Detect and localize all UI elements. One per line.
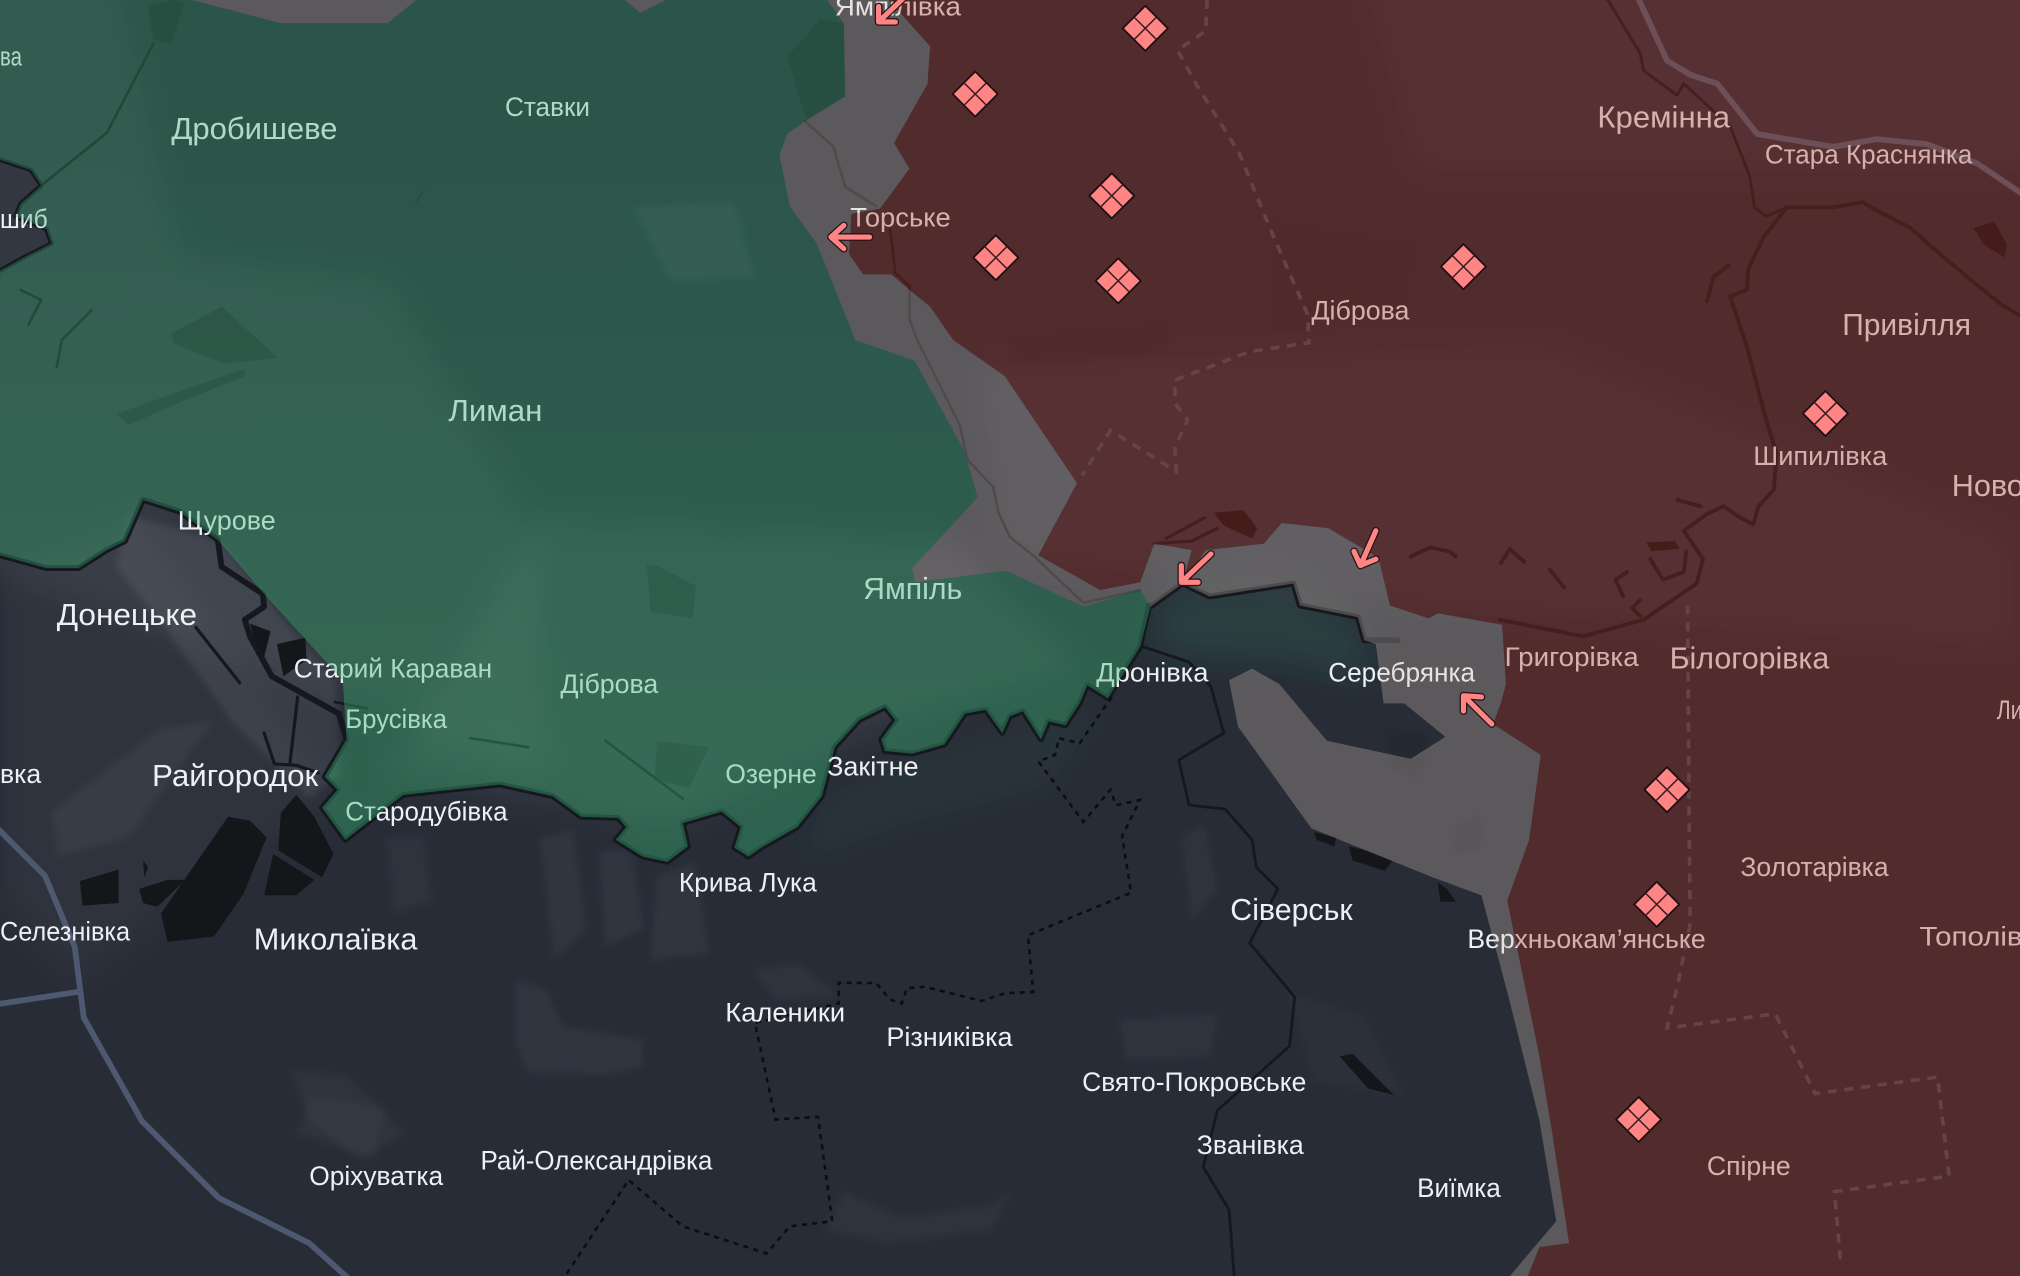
label: Привілля: Привілля [1842, 307, 1971, 342]
icon: diamond 2 [953, 71, 998, 117]
label: шиб: шиб [0, 204, 48, 234]
arrow: Ямпілівка [879, 0, 908, 22]
icon: diamond 10 [1616, 1097, 1661, 1142]
label: Стародубівка: Стародубівка [345, 797, 508, 827]
label: Селезнівка: Селезнівка [0, 916, 130, 946]
label: Виїмка: Виїмка [1417, 1173, 1501, 1203]
label: Григорівка: Григорівка [1505, 642, 1639, 672]
dashed administrative borders [566, 697, 1140, 1275]
territory: red occupied area [849, 0, 2020, 1276]
label: Дробишеве: Дробишеве [171, 111, 338, 146]
label: Різниківка: Різниківка [886, 1022, 1013, 1052]
label: вка: вка [0, 759, 42, 789]
icon: diamond 4 [973, 235, 1018, 280]
label: Білогорівка: Білогорівка [1670, 641, 1830, 676]
label: Райгородок: Райгородок [152, 758, 319, 793]
label: Свято-Покровське: Свято-Покровське [1082, 1067, 1306, 1097]
label: Миколаївка: Миколаївка [254, 921, 418, 956]
label: Озерне: Озерне [725, 759, 817, 789]
arrow: north of Серебрянка [1354, 531, 1376, 566]
label: Закітне: Закітне [827, 752, 919, 782]
arrow: Торське [831, 225, 870, 249]
label: Каленики: Каленики [725, 998, 845, 1028]
label: Торське: Торське [850, 203, 951, 233]
arrows: attack directions [831, 0, 1492, 724]
label: Діброва east: Діброва [1311, 295, 1410, 325]
label: Шипилівка: Шипилівка [1753, 441, 1888, 471]
icon: diamond 9 [1634, 882, 1679, 927]
broad tonal areas [0, 0, 2020, 979]
icon: diamond 7 [1803, 391, 1848, 436]
territory: green liberated area [0, 0, 1150, 862]
label: Стара Краснянка: Стара Краснянка [1765, 140, 1973, 170]
label: Брусівка: Брусівка [345, 704, 447, 734]
icon: diamond 5 [1096, 258, 1141, 303]
label: Кремінна: Кремінна [1597, 100, 1731, 135]
label: Верхньокам’янське: Верхньокам’янське [1467, 924, 1706, 954]
territory: grey contested area [192, 0, 1569, 1276]
icon: diamond 6 [1441, 244, 1486, 289]
label: Оріхуватка: Оріхуватка [309, 1161, 443, 1191]
arrow: Дронівка [1181, 554, 1211, 582]
label: Тополів: Тополів [1919, 922, 2020, 952]
label: Діброва west: Діброва [560, 669, 659, 699]
label: Дронівка: Дронівка [1096, 657, 1209, 687]
label: ва: ва [0, 42, 22, 72]
label: Золотарівка: Золотарівка [1740, 852, 1889, 882]
label: Крива Лука: Крива Лука [679, 867, 817, 897]
label: Донецьке: Донецьке [57, 597, 197, 632]
terrain patches [52, 202, 1481, 1243]
label: Старий Караван: Старий Караван [294, 654, 492, 684]
label: Щурове: Щурове [178, 505, 276, 535]
forest patches [117, 0, 845, 788]
label: Сіверськ: Сіверськ [1230, 892, 1353, 927]
label: Лиман: Лиман [448, 393, 542, 428]
water bodies [80, 222, 2007, 1095]
label: Званівка: Званівка [1197, 1130, 1304, 1160]
label: Ставки: Ставки [505, 92, 590, 122]
label: Рай-Олександрівка: Рай-Олександрівка [481, 1146, 713, 1176]
arrow: Серебрянка east [1463, 696, 1492, 724]
icon: diamond 8 [1644, 767, 1690, 812]
label: Ямпіль: Ямпіль [863, 571, 962, 606]
dashed borders in occupied area [1082, 0, 1949, 1266]
label: Спірне: Спірне [1707, 1151, 1791, 1181]
icon: diamond 1 [1123, 6, 1168, 51]
label: Серебрянка: Серебрянка [1328, 657, 1475, 687]
icons: fortification diamonds [953, 6, 1848, 1142]
icon: diamond 3 [1089, 173, 1134, 218]
